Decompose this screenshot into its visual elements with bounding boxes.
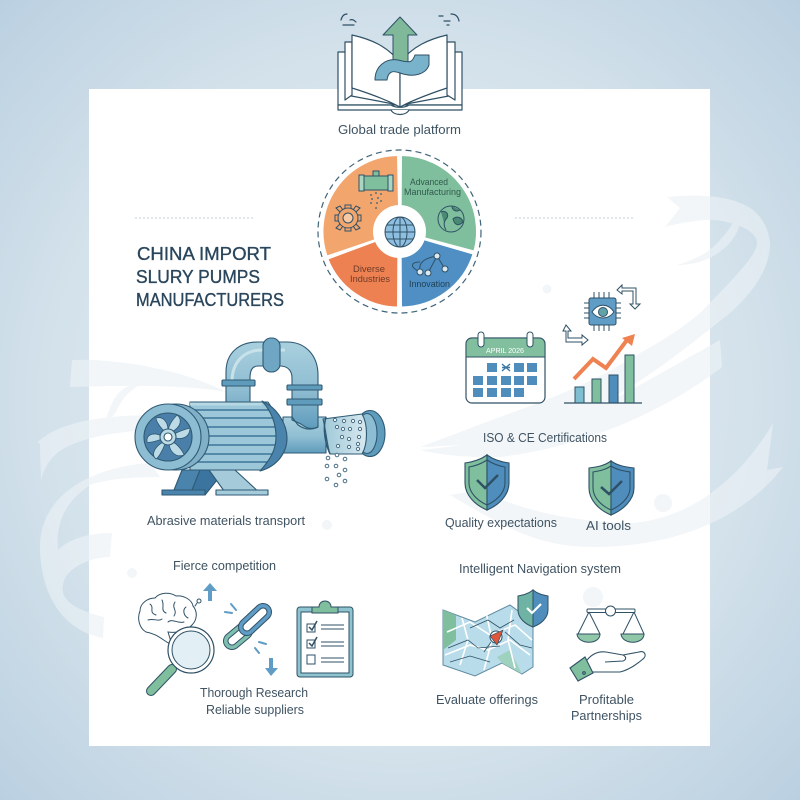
- compass: [490, 631, 502, 643]
- icon: gear: [335, 205, 361, 231]
- title: SLURY PUMPS: [136, 266, 260, 287]
- text: Fierce competition: Fierce competition: [173, 558, 276, 573]
- pump legs: [162, 470, 268, 495]
- icon: balance scales: [577, 606, 644, 642]
- motor body: [190, 401, 287, 471]
- text: Innovation: Innovation: [409, 279, 450, 290]
- text: Intelligent Navigation system: Intelligent Navigation system: [459, 561, 621, 576]
- text: AI tools: AI tools: [586, 518, 632, 533]
- text: Advanced Manufacturing: Manufacturing: [404, 187, 461, 198]
- text: Advanced Manufacturing: [404, 177, 461, 198]
- dashed divider left: [135, 217, 255, 219]
- lens: [168, 627, 214, 673]
- icon: calendar April 2026: APRIL 2026: [486, 346, 524, 355]
- illustration: slurry pump: [135, 338, 385, 495]
- icon: small world globe: [438, 206, 464, 232]
- arrow: bottom left: [563, 325, 588, 345]
- icon: brain with magnifier: [139, 593, 214, 691]
- slurry particles: [325, 418, 362, 487]
- map shield: [518, 590, 548, 627]
- segment: Diverse Industries: [328, 233, 398, 307]
- title: MANUFACTURERS: [136, 289, 284, 310]
- text: Advanced Manufacturing: Advanced: [410, 177, 448, 188]
- motor fan cover: [135, 404, 209, 470]
- icon: clipboard checklist: [297, 601, 353, 677]
- icon: down arrow: [265, 658, 278, 676]
- rising arrow head: [622, 334, 635, 346]
- icon: chain link: [225, 604, 266, 653]
- icon: pipe with drops: [359, 171, 393, 209]
- icon: AI chip with eye: [563, 285, 640, 345]
- text: ISO & CE Certifications: ISO & CE Certifications: [483, 430, 607, 445]
- segment: top left orange: [323, 156, 399, 256]
- loop pipe: [222, 338, 322, 429]
- text: Diverse Industries: [350, 264, 390, 285]
- white content panel: [89, 89, 710, 746]
- text: Quality expectations: Quality expectations: [445, 515, 557, 530]
- text: Thorough Research: Thorough Research: [200, 685, 308, 700]
- icon: quality shield: [465, 455, 509, 510]
- handle: [151, 669, 172, 691]
- discharge pipe: [283, 410, 385, 456]
- pie diagram: [318, 150, 481, 313]
- icon: open hand: [570, 652, 645, 681]
- icon: calendar April 2026: [466, 332, 545, 403]
- background swooshes: [37, 196, 783, 638]
- text: Reliable suppliers: Reliable suppliers: [206, 702, 304, 717]
- arrow: top right: [617, 285, 640, 309]
- icon: network nodes: [412, 253, 448, 276]
- arrow: orange trend: [574, 340, 627, 379]
- text: Profitable: Profitable: [579, 692, 634, 707]
- segment: Innovation: [401, 233, 473, 307]
- title: CHINA IMPORT: [137, 243, 271, 264]
- icon: up arrow: [203, 583, 217, 601]
- icon: AI tools shield: [589, 461, 634, 515]
- text: Diverse Industries: Diverse: [353, 264, 385, 275]
- segment: Advanced Manufacturing: [401, 156, 477, 251]
- icon: map with compass: [443, 590, 548, 676]
- icon: center globe: [385, 217, 415, 247]
- text: Diverse Industries: Industries: [350, 274, 390, 285]
- text: Global trade platform: Global trade platform: [338, 122, 461, 137]
- text: Partnerships: Partnerships: [571, 708, 642, 723]
- title: [136, 243, 284, 310]
- text: Evaluate offerings: Evaluate offerings: [436, 692, 538, 707]
- dashed divider right: [515, 217, 635, 219]
- icon: open book with arrow: [338, 14, 462, 114]
- text: Abrasive materials transport: Abrasive materials transport: [147, 513, 305, 528]
- center hub: [373, 205, 426, 258]
- bar chart with rising arrow: [564, 340, 642, 403]
